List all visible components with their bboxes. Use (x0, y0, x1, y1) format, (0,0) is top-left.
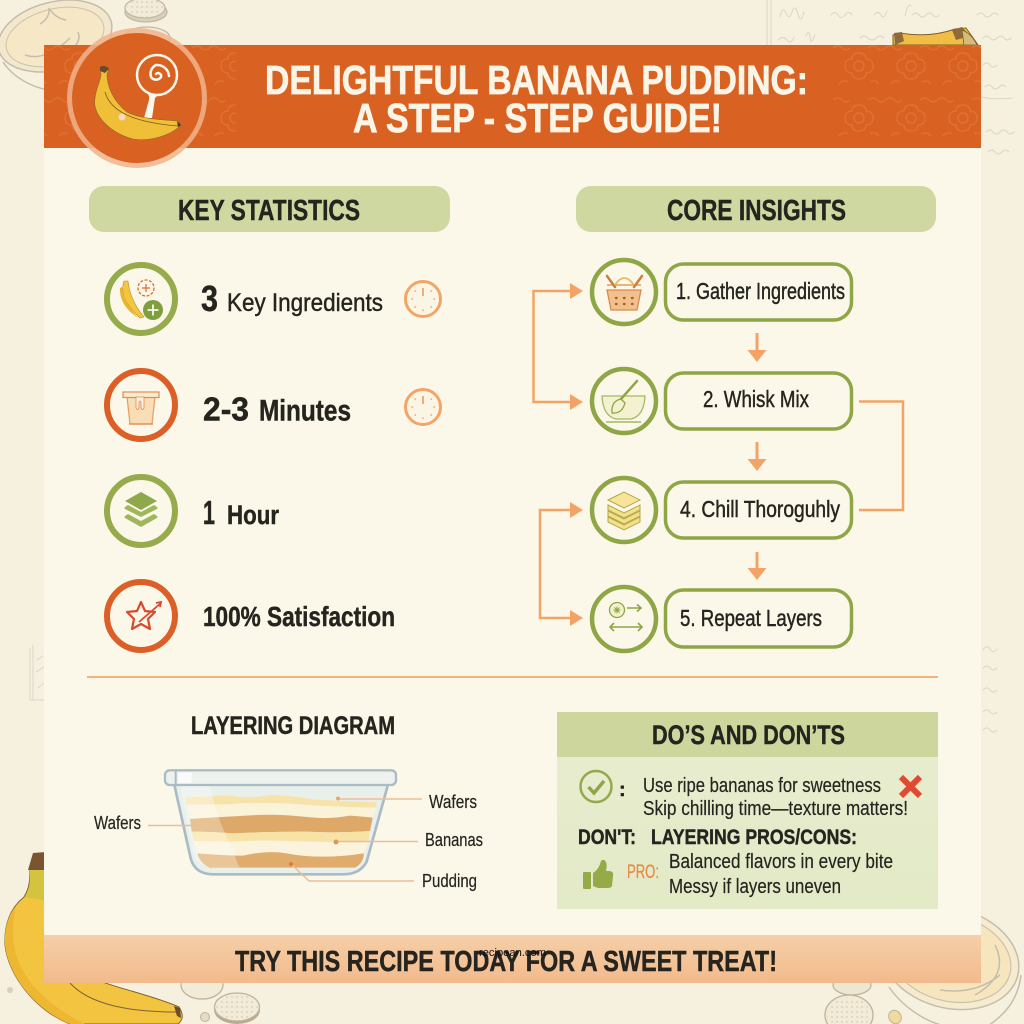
label: wafers left: Wafers (94, 813, 141, 833)
title (265, 57, 808, 141)
step 4: chill thoroughly: 4. Chill Thoroguhly (680, 496, 840, 522)
stat: 100% satisfaction: 100% Satisfaction (203, 601, 395, 632)
flow arrow: left bracket lower (540, 502, 583, 626)
step 5: repeat layers (592, 587, 852, 651)
icon: clock (406, 390, 440, 424)
layering pros and cons heading: LAYERING PROS/CONS: (651, 826, 857, 849)
stat: 2-3 minutes: 2-3 (203, 390, 249, 428)
panel: do's and don'ts (557, 712, 938, 909)
step 5: repeat layers: 5. Repeat Layers (680, 605, 822, 631)
pro text: Balanced flavors in every bite (669, 851, 893, 873)
header banner (44, 45, 981, 148)
title: DELIGHTFUL BANANA PUDDING: (265, 57, 808, 103)
stat: 1 hour: Hour (227, 500, 279, 530)
step 1: gather ingredients (592, 260, 852, 324)
icon: red cross (901, 777, 920, 796)
stat: 3 key ingredients: Key Ingredients (227, 289, 383, 317)
step 1: gather ingredients: 1. Gather Ingredients (676, 278, 845, 304)
header emblem: banana and spiral spoon (67, 28, 207, 168)
stat: 2-3 minutes: Minutes (259, 394, 351, 428)
stat: 2-3 minutes (107, 371, 351, 439)
pro label: PRO: (627, 862, 659, 883)
sketch: notebook left (30, 645, 44, 700)
footer banner (44, 935, 981, 983)
label: pudding: Pudding (422, 871, 477, 891)
label: wafers right: Wafers (429, 792, 477, 812)
panel heading: DO’S AND DON’TS (652, 720, 845, 750)
title: A STEP - STEP GUIDE! (353, 95, 722, 141)
heading: core insights (576, 186, 936, 232)
step 2: whisk mix (592, 369, 852, 433)
con text: Messy if layers uneven (669, 876, 841, 898)
stat: 1 hour: 1 (203, 494, 215, 531)
flow arrow: left bracket upper (534, 283, 583, 410)
illustration: banana behind header top right (893, 27, 978, 45)
heading: layering diagram: LAYERING DIAGRAM (191, 712, 395, 740)
flow arrow: right bracket (859, 402, 903, 510)
stat: 1 hour (107, 477, 279, 545)
layering diagram: glass bowl (148, 770, 422, 881)
icon: check circle (580, 771, 612, 802)
sketch: pudding bowl top left (0, 0, 120, 91)
footer banner: TRY THIS RECIPE TODAY FOR A SWEET TREAT! (235, 946, 777, 978)
heading: key statistics: KEY STATISTICS (178, 195, 360, 227)
stat: 3 key ingredients (107, 265, 383, 333)
heading: core insights: CORE INSIGHTS (667, 195, 846, 227)
label: bananas: Bananas (425, 830, 483, 850)
illustration: large banana bottom left (5, 852, 182, 1024)
flow arrows: downward (748, 333, 766, 580)
heading: key statistics (89, 186, 450, 232)
sketch: handwriting notes lower right (983, 647, 997, 732)
stat: 100% satisfaction (107, 582, 395, 650)
icon: spiral spoon (137, 55, 177, 118)
label lines (148, 799, 422, 881)
sketch: wafer cookies bottom (181, 971, 904, 1024)
icon: banana (95, 66, 181, 140)
step 4: chill thoroughly (592, 478, 852, 542)
sketch: wafer cookies top (124, 0, 170, 49)
sketch: handwriting notes top right (767, 0, 1014, 154)
main cream panel (44, 100, 981, 960)
stat: 3 key ingredients: 3 (201, 278, 218, 319)
don't label: DON'T: (578, 826, 636, 849)
do text: Use ripe bananas for sweetness (643, 775, 881, 797)
colon: : (619, 779, 626, 801)
don't text: Skip chilling time—texture matters! (643, 798, 908, 820)
watermark: recipean.com (479, 947, 546, 959)
sketch: pudding bowl bottom right (869, 892, 1024, 1024)
step 2: whisk mix: 2. Whisk Mix (703, 386, 809, 412)
icon: clock (406, 282, 440, 316)
icon: thumbs up (583, 860, 613, 889)
